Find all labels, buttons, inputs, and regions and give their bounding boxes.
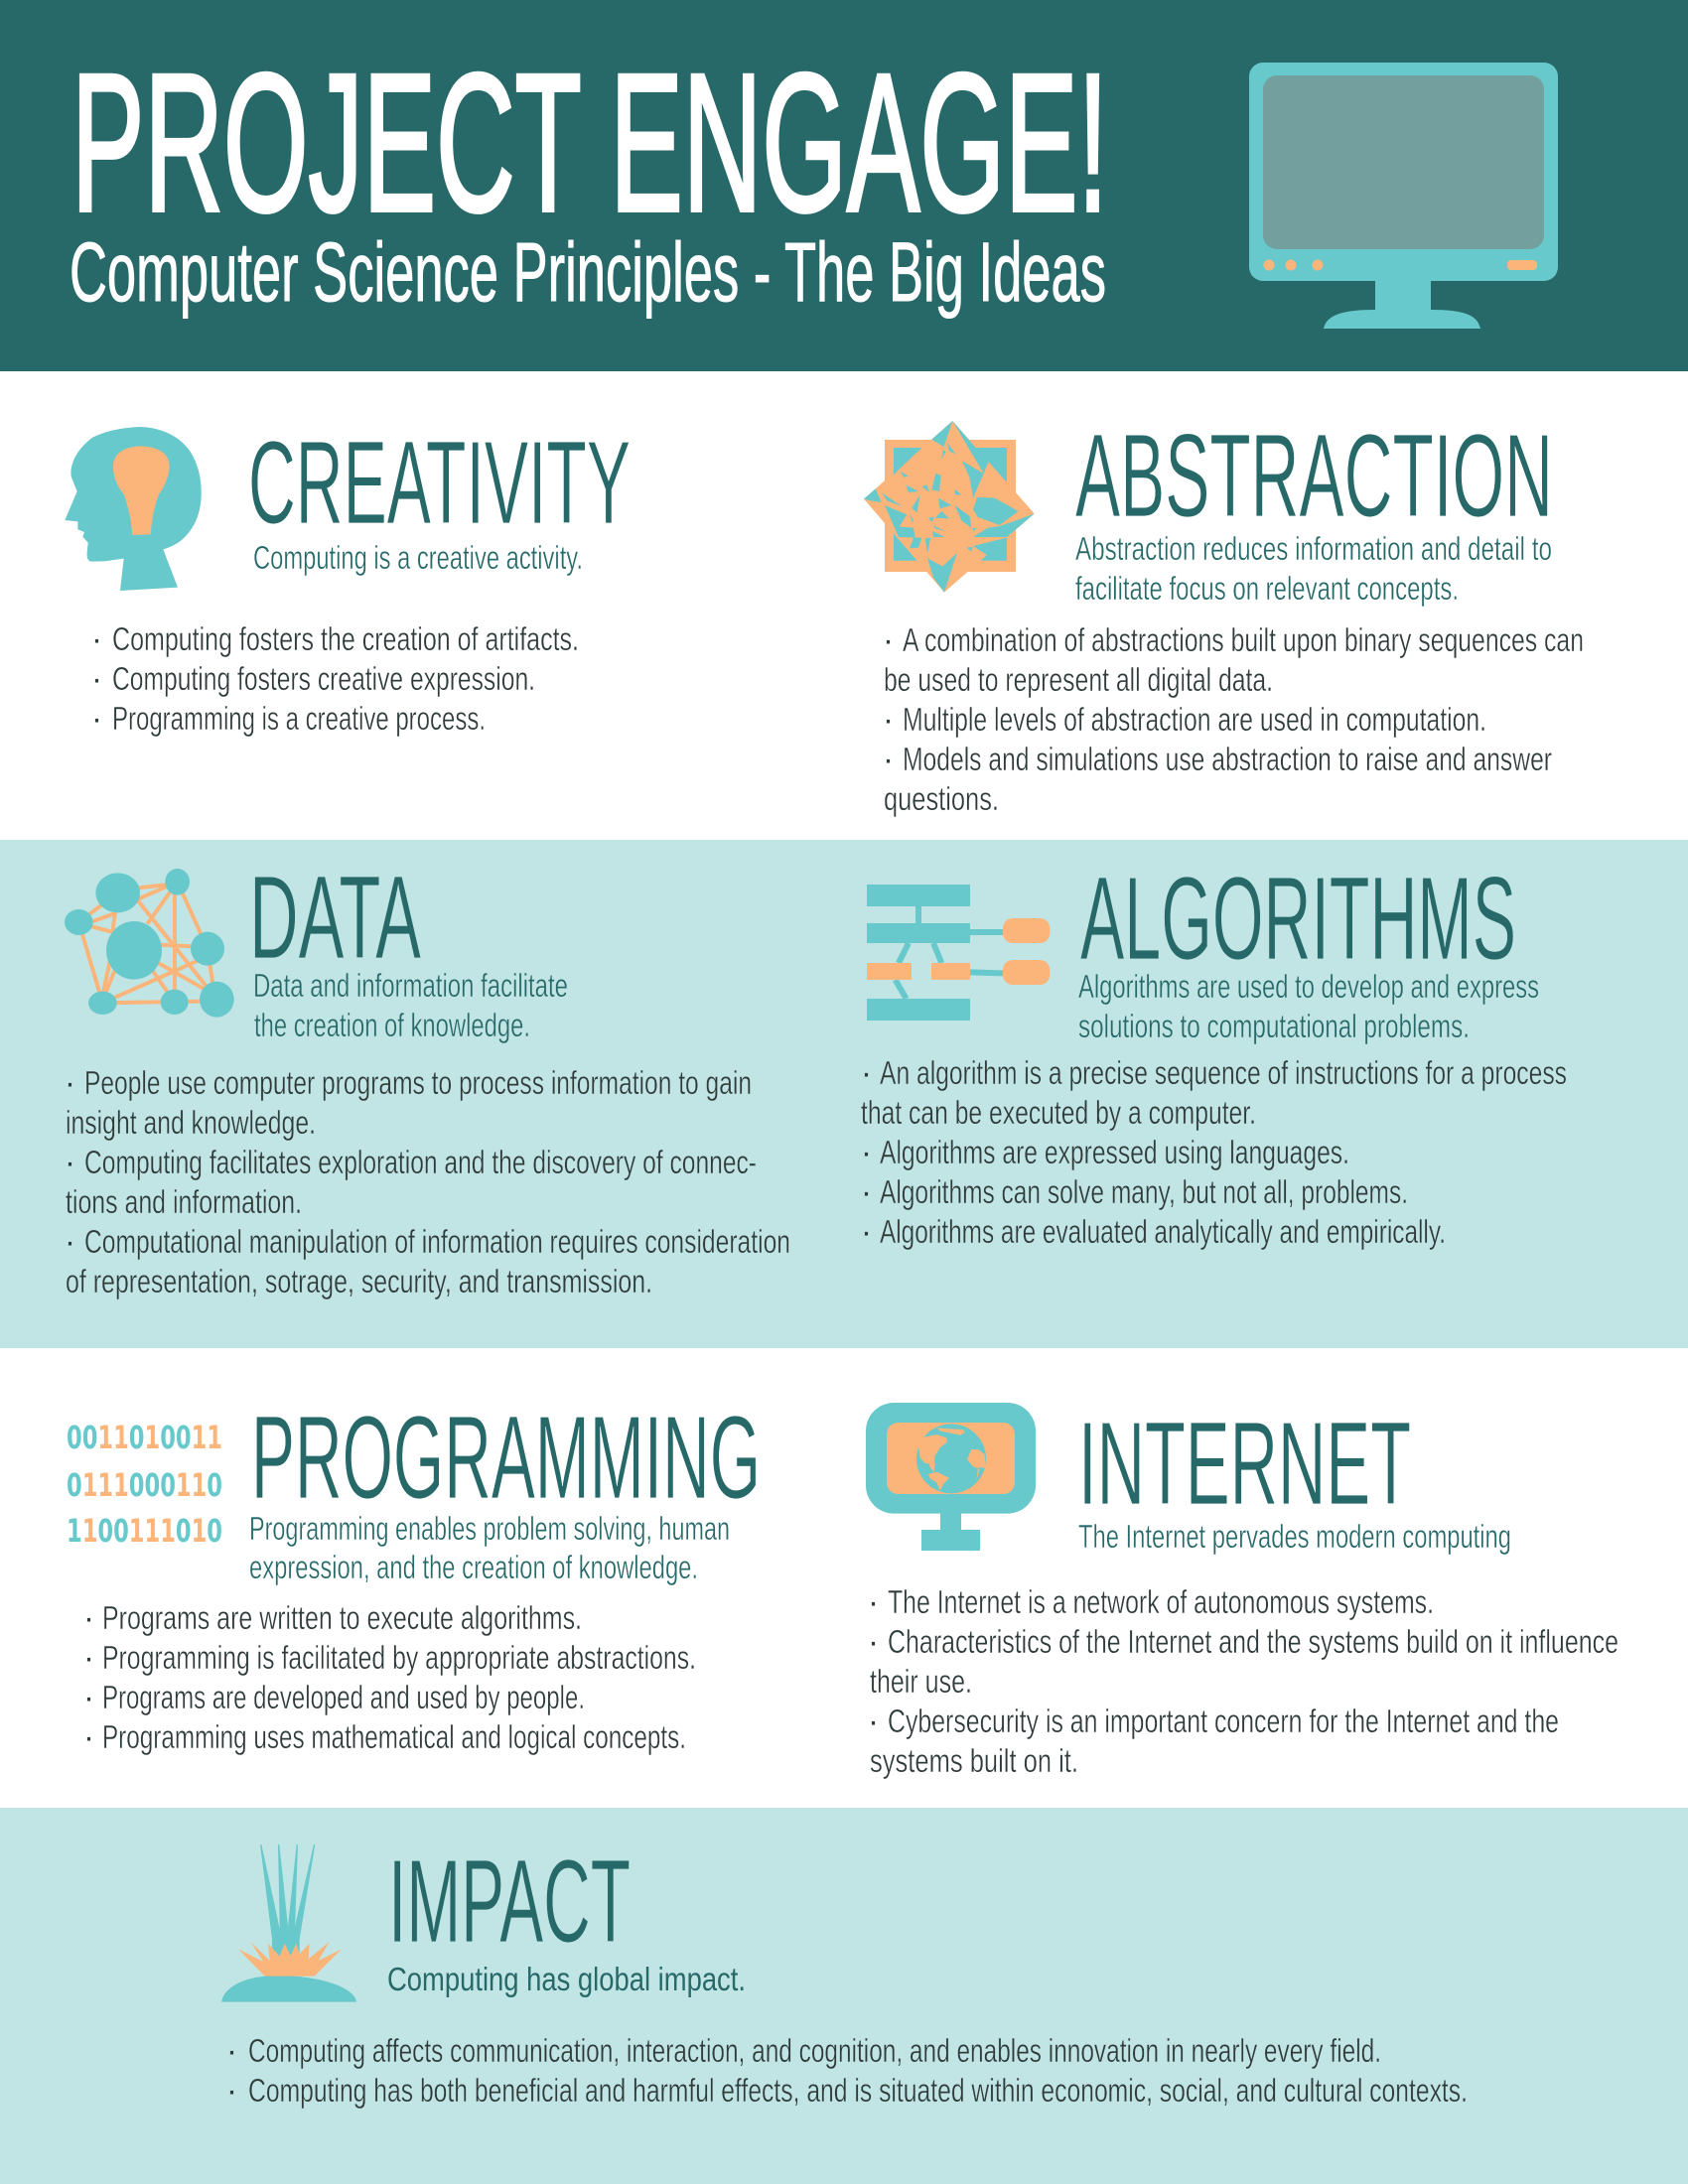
subheading: algorithms: solutions to computational problems. — [1078, 1008, 1470, 1044]
bullet list: internet: · — [868, 1703, 879, 1739]
bullet list: creativity — [91, 620, 579, 737]
bullet list: creativity: · — [91, 700, 102, 737]
bullet list: programming: · — [83, 1639, 94, 1676]
bullet list: algorithms: Algorithms are expressed using languages. — [880, 1134, 1349, 1170]
subheading: algorithms — [1078, 968, 1539, 1044]
bullet list: abstraction — [883, 621, 1584, 817]
icon: head with light bulb — [65, 427, 202, 591]
icon: binary digits: 0011010011 — [67, 1419, 222, 1456]
panel: impact — [221, 1836, 1468, 2109]
subheading: programming — [249, 1510, 730, 1585]
bullet list: data — [65, 1064, 790, 1299]
bullet list: internet: · — [868, 1583, 879, 1620]
bullet list: creativity: · — [91, 660, 102, 697]
icon: binary digits: 1100111010 — [67, 1512, 222, 1550]
icon: network graph — [65, 869, 234, 1018]
bullet list: data: Computing facilitates exploration and the discovery of connec- — [84, 1144, 757, 1180]
subheading: abstraction: facilitate focus on relevant concepts. — [1075, 570, 1459, 607]
bullet list: data: · — [65, 1144, 75, 1180]
bullet list: abstraction: · — [883, 621, 894, 658]
bullet list: creativity: Programming is a creative process. — [112, 700, 486, 737]
panel: internet — [866, 1398, 1618, 1779]
bullet list: data: · — [65, 1064, 75, 1101]
bullet list: programming: Programming is facilitated by appropriate abstractions. — [102, 1639, 696, 1676]
icon: meteor impact — [221, 1844, 356, 2002]
icon: monitor with globe — [866, 1403, 1036, 1551]
bullet list: programming: · — [83, 1599, 94, 1636]
subheading: impact: Computing has global impact. — [387, 1961, 746, 1997]
bullet list: algorithms: · — [861, 1134, 872, 1170]
bullet list: algorithms: · — [861, 1054, 872, 1091]
bullet list: programming: Programs are written to execute algorithms. — [102, 1599, 582, 1636]
bullet list: programming: Programming uses mathematical and logical concepts. — [102, 1718, 686, 1755]
bullet list: creativity: Computing fosters creative expression. — [112, 660, 535, 697]
icon: computer monitor — [1249, 63, 1558, 329]
panel: abstraction — [864, 410, 1584, 817]
subheading: internet: The Internet pervades modern computing — [1078, 1518, 1511, 1555]
bullet list: impact: · — [226, 2032, 237, 2069]
band: impact background — [0, 1808, 1688, 2184]
bullet list: impact — [226, 2032, 1468, 2109]
bullet list: internet: systems built on it. — [870, 1742, 1078, 1779]
subheading: data: Data and information facilitate — [253, 967, 568, 1004]
bullet list: algorithms: that can be executed by a computer. — [861, 1094, 1256, 1131]
band: data and algorithms background — [0, 840, 1688, 1348]
bullet list: data: of representation, sotrage, security, and transmission. — [66, 1263, 652, 1299]
subheading: programming: expression, and the creation of knowledge. — [249, 1549, 698, 1585]
bullet list: internet: The Internet is a network of autonomous systems. — [888, 1583, 1434, 1620]
panel: creativity — [65, 417, 631, 737]
bullet list: algorithms: · — [861, 1173, 872, 1210]
subheading: data: the creation of knowledge. — [254, 1007, 530, 1043]
bullet list: abstraction: · — [883, 701, 894, 738]
bullet list: data: People use computer programs to process information to gain — [84, 1064, 752, 1101]
bullet list: programming: Programs are developed and used by people. — [102, 1679, 585, 1715]
heading: internet: INTERNET — [1078, 1398, 1411, 1530]
bullet list: programming — [83, 1599, 696, 1755]
icon: binary digits — [67, 1419, 222, 1550]
bullet list: creativity: · — [91, 620, 102, 657]
panel: data — [65, 852, 790, 1299]
subheading: creativity: Computing is a creative activity. — [253, 539, 583, 576]
bullet list: algorithms — [861, 1054, 1567, 1250]
bullet list: data: Computational manipulation of information requires consideration — [84, 1223, 790, 1260]
bullet list: internet: their use. — [870, 1663, 972, 1700]
heading: creativity: CREATIVITY — [248, 417, 631, 549]
bullet list: data: insight and knowledge. — [66, 1104, 316, 1141]
heading: programming: PROGRAMMING — [251, 1392, 761, 1524]
bullet list: abstraction: Multiple levels of abstraction are used in computation. — [903, 701, 1486, 738]
bullet list: data: · — [65, 1223, 75, 1260]
bullet list: abstraction: questions. — [884, 780, 999, 817]
bullet list: abstraction: · — [883, 741, 894, 777]
bullet list: algorithms: · — [861, 1213, 872, 1250]
subheading: abstraction — [1075, 530, 1552, 607]
icon: abstract star — [864, 421, 1035, 593]
panel: programming — [67, 1392, 761, 1755]
bullet list: data: tions and information. — [66, 1183, 302, 1220]
bullet list: creativity: Computing fosters the creation of artifacts. — [112, 620, 579, 657]
subtitle: Computer Science Principles - The Big Ideas — [70, 225, 1106, 319]
heading: impact: IMPACT — [388, 1836, 631, 1968]
bullet list: impact: · — [226, 2072, 237, 2109]
panel: header — [0, 0, 1688, 371]
bullet list: programming: · — [83, 1679, 94, 1715]
subheading: data — [253, 967, 568, 1043]
bullet list: algorithms: Algorithms can solve many, but not all, problems. — [880, 1173, 1408, 1210]
bullet list: internet: · — [868, 1623, 879, 1660]
bullet list: programming: · — [83, 1718, 94, 1755]
bullet list: internet — [868, 1583, 1618, 1779]
icon: binary digits: 0111000110 — [67, 1466, 222, 1504]
subheading: programming: Programming enables problem solving, human — [249, 1510, 730, 1547]
icon: flowchart — [867, 885, 1050, 1021]
bullet list: abstraction: be used to represent all digital data. — [884, 661, 1273, 698]
heading: data: DATA — [249, 852, 421, 984]
bullet list: algorithms: Algorithms are evaluated analytically and empirically. — [880, 1213, 1446, 1250]
panel: algorithms — [861, 853, 1567, 1250]
